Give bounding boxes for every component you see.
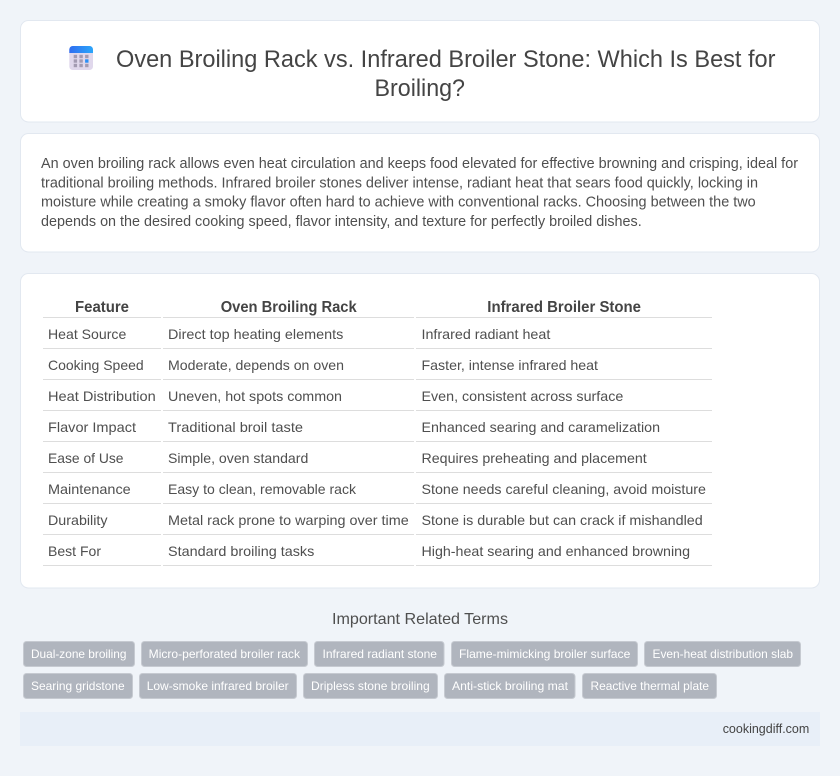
table row: heat distribution: Uneven, hot spots common (168, 388, 342, 404)
table row: cooking speed: Cooking Speed (48, 357, 144, 373)
footer source label: cookingdiff.com (723, 722, 809, 736)
table row: cooking speed (48, 357, 598, 373)
table row: maintenance: Stone needs careful cleaning, avoid moisture (422, 481, 706, 497)
table row: heat source: Infrared radiant heat (422, 326, 550, 342)
table row: best for: Best For (48, 543, 101, 559)
heading: important related terms: Important Related Terms (332, 611, 508, 628)
table row: durability: Durability (48, 512, 108, 528)
table row: flavor impact (48, 419, 660, 435)
table row: heat distribution: Heat Distribution (48, 388, 156, 404)
title (116, 46, 776, 102)
table row: flavor impact: Traditional broil taste (168, 419, 303, 435)
table row: ease of use: Requires preheating and placement (422, 450, 647, 466)
related terms chips (24, 642, 800, 698)
table row: flavor impact: Flavor Impact (48, 419, 136, 435)
table row: maintenance: Easy to clean, removable rack (168, 481, 357, 497)
table row: ease of use: Ease of Use (48, 450, 124, 466)
related terms chips: Low-smoke infrared broiler (147, 679, 289, 693)
table row: best for: High-heat searing and enhanced browning (422, 543, 690, 559)
related terms chips: Dual-zone broiling (31, 647, 126, 661)
related terms chips: Even-heat distribution slab (652, 647, 793, 661)
text block: introduction paragraph: depends on the desired cooking speed, flavor intensity, and texture for perfectly broiled dishes. (41, 214, 642, 230)
footer (20, 712, 820, 746)
title: Oven Broiling Rack vs. Infrared Broiler Stone: Which Is Best for (116, 46, 776, 73)
related terms chips: Searing gridstone (31, 679, 125, 693)
table row: cooking speed: Faster, intense infrared heat (422, 357, 598, 373)
table row: maintenance (48, 481, 706, 497)
table row: heat source: Direct top heating elements (168, 326, 343, 342)
related terms chips: Dripless stone broiling (311, 679, 430, 693)
title: Broiling? (374, 75, 465, 102)
table row: heat source: Heat Source (48, 326, 127, 342)
table row: ease of use: Simple, oven standard (168, 450, 308, 466)
table row: cooking speed: Moderate, depends on oven (168, 357, 344, 373)
table row: heat distribution (48, 388, 624, 404)
related terms chips: Flame-mimicking broiler surface (459, 647, 631, 661)
panel: title card (20, 20, 820, 122)
table header row: Oven Broiling Rack (221, 299, 357, 316)
text block: introduction paragraph (41, 156, 798, 230)
table row: ease of use (48, 450, 647, 466)
panel: introduction (20, 134, 820, 252)
icon: calendar (69, 46, 93, 70)
related terms chips: Reactive thermal plate (590, 679, 709, 693)
text block: introduction paragraph: moisture while creating a smoky flavor often hard to achieve with conventional racks. Choosing between the two (41, 195, 756, 211)
table row: durability: Metal rack prone to warping over time (168, 512, 409, 528)
panel: comparison table (20, 274, 820, 588)
table row: durability: Stone is durable but can crack if mishandled (422, 512, 703, 528)
table header row (75, 299, 641, 316)
table row: heat source (48, 326, 550, 342)
table row: durability (48, 512, 703, 528)
table header row: Infrared Broiler Stone (487, 299, 641, 316)
text block: introduction paragraph: traditional broiling methods. Infrared broiler stones deliver intense, radiant heat that sears food quickly, locking in (41, 175, 758, 191)
table row: maintenance: Maintenance (48, 481, 131, 497)
table row: flavor impact: Enhanced searing and caramelization (422, 419, 660, 435)
text block: introduction paragraph: An oven broiling rack allows even heat circulation and keeps food elevated for effective browning and crisping, ideal for (41, 156, 798, 172)
related terms chips: Infrared radiant stone (322, 647, 437, 661)
related terms chips: Anti-stick broiling mat (452, 679, 569, 693)
table row: best for (48, 543, 690, 559)
table row: heat distribution: Even, consistent across surface (422, 388, 624, 404)
table row: best for: Standard broiling tasks (168, 543, 314, 559)
related terms chips: Micro-perforated broiler rack (149, 647, 301, 661)
table header row: Feature (75, 299, 129, 316)
